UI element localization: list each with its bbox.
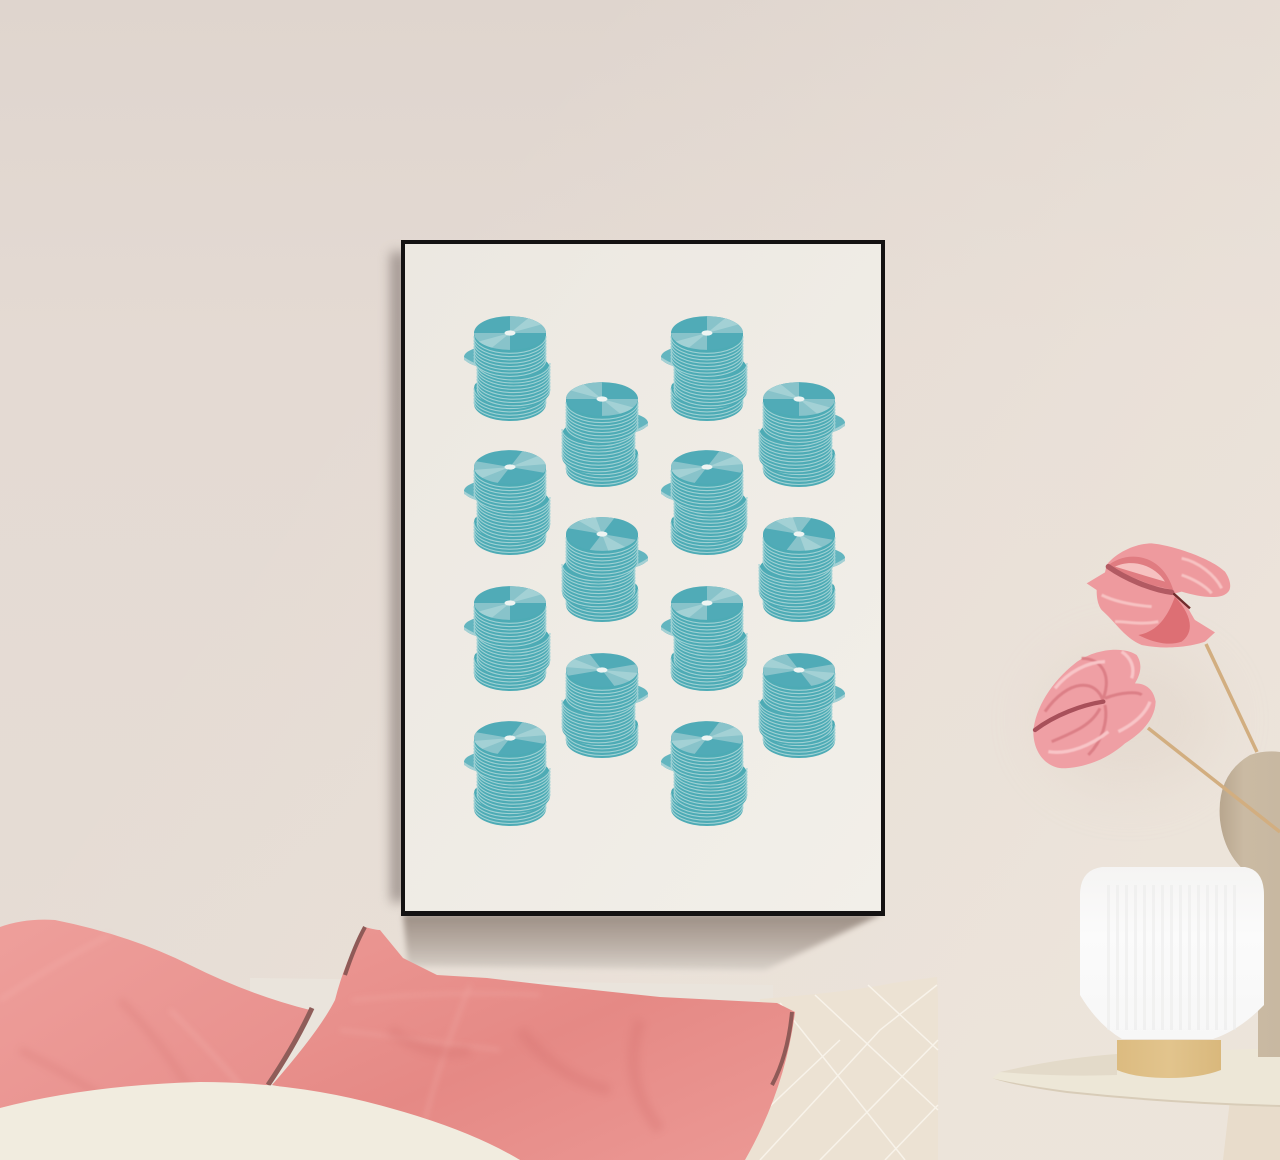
poster paper [405, 244, 881, 911]
CD stack 1 [464, 316, 550, 421]
CD stack 13 [753, 512, 845, 622]
CD stack 7 [661, 586, 747, 691]
beige vase [1220, 751, 1280, 1057]
CD stack 2 [464, 445, 556, 555]
table lamp [1080, 867, 1264, 1078]
CD stack 6 [661, 445, 753, 555]
CD stack 8 [661, 716, 753, 826]
table top [992, 1048, 1280, 1107]
frame [401, 240, 885, 916]
CD stack 10 [556, 512, 648, 622]
lamp shade [1080, 867, 1264, 1039]
frame shadow on wall [391, 252, 882, 970]
CD stack 3 [464, 586, 550, 691]
upper anthurium flower [1087, 543, 1230, 647]
CD stack 14 [753, 648, 845, 758]
pink pillow front [272, 927, 795, 1160]
beige diamond cushion [740, 977, 938, 1160]
lamp base [1117, 1040, 1221, 1078]
CD stack 12 [759, 382, 845, 487]
CD stack 5 [661, 316, 747, 421]
cream knit cushion [0, 1082, 520, 1160]
CD stack 11 [556, 648, 648, 758]
side table [992, 1048, 1280, 1160]
pink pillow left [0, 920, 312, 1115]
CD stack 4 [464, 716, 556, 826]
CD stack 9 [562, 382, 648, 487]
sofa back [250, 978, 773, 1160]
table leg [1223, 1100, 1280, 1160]
flower stems [1148, 644, 1280, 832]
lower anthurium flower [1033, 650, 1156, 768]
framed poster [401, 240, 885, 916]
